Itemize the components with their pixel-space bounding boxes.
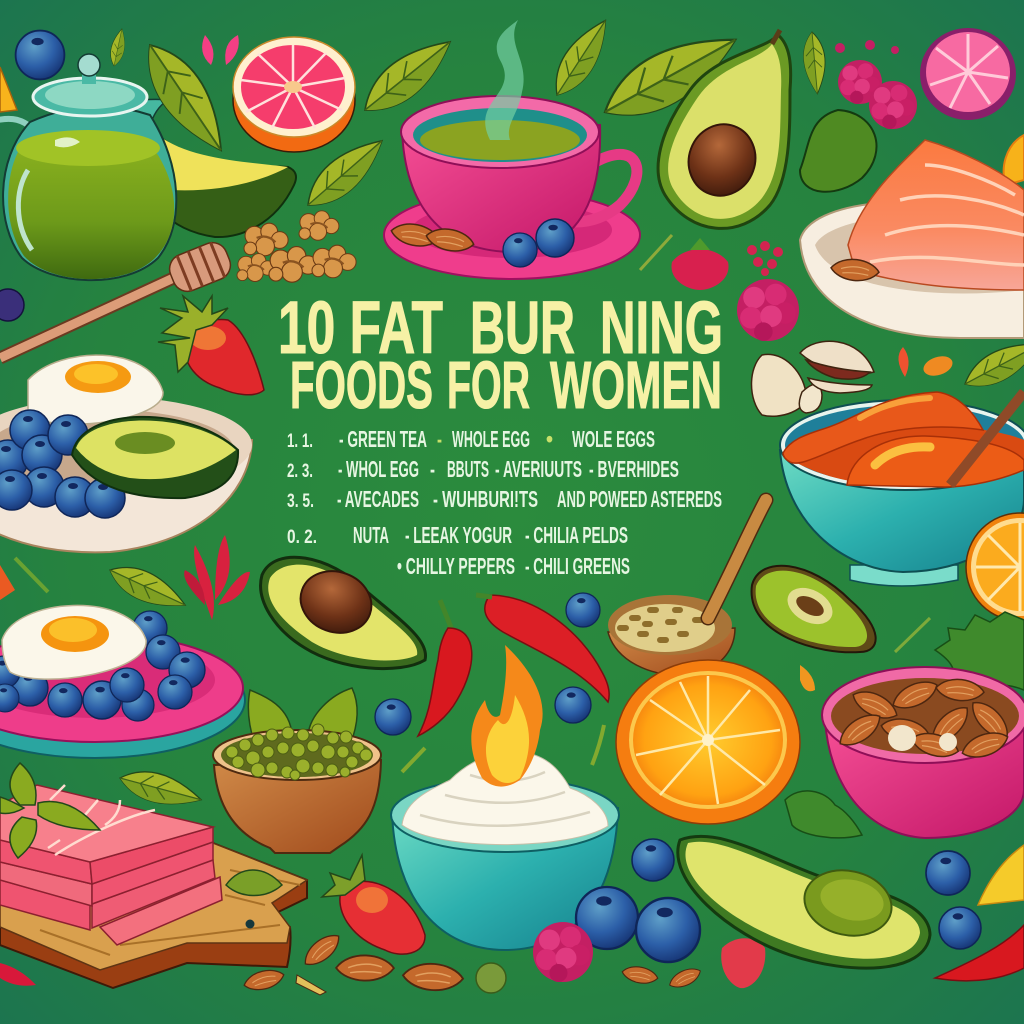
icon: blueberries bottom centre: [576, 839, 981, 962]
icon: green nut: [476, 963, 506, 993]
icon: grapefruit slice: [233, 37, 355, 152]
sub-element: blueberries on plate: [0, 611, 205, 721]
sub-element: salmon fillet: [848, 140, 1024, 290]
icon: glass teapot of green tea: [0, 54, 176, 280]
title: FOODS: [290, 348, 433, 423]
title: FOR: [447, 348, 530, 423]
list of foods: - BVERHIDES: [589, 456, 679, 482]
icon: green tea cup with saucer: [384, 20, 640, 279]
list of foods: 3. 5.: [287, 491, 314, 512]
list of foods: -: [430, 456, 435, 482]
panel: tuna on cutting board: [0, 763, 307, 988]
list of foods: •: [546, 426, 553, 452]
sub-element: spoon: [950, 392, 1024, 485]
icon: raspberry below: [737, 279, 799, 341]
icon: blueberry top left: [16, 31, 64, 79]
list of foods: -: [437, 426, 442, 452]
icon: leaf top centre right: [544, 12, 618, 103]
icon: red chili upright: [418, 600, 472, 736]
sub-element: blueberries in bowl: [0, 410, 125, 518]
icon: orange wedge left edge: [0, 67, 17, 112]
icon: almonds bottom row: [242, 930, 465, 995]
sub-element: chicken: [797, 426, 1024, 487]
icon: walnuts: [237, 211, 356, 282]
icon: orange slice right: [966, 513, 1024, 621]
icon: avocado wedge behind teapot: [158, 135, 296, 237]
icon: yogurt bowl with flame: [391, 645, 619, 950]
icon: leaf lower left: [116, 764, 205, 814]
icon: large orange slice: [616, 660, 800, 824]
icon: small green avocado: [800, 110, 877, 192]
icon: red chili bottom right: [935, 925, 1024, 981]
icon: leaf near teapot: [132, 33, 239, 162]
list of foods: - LEEAK YOGUR: [405, 522, 512, 548]
icon: pink grapefruit top right: [920, 28, 1016, 120]
list of foods: NUTA: [353, 522, 389, 548]
sub-element: cutting board: [0, 843, 307, 988]
list of foods: - WHOL EGG: [338, 456, 419, 482]
icon: bowl of grains with wooden spoon: [608, 500, 766, 675]
sub-element: yogurt swirl: [402, 752, 608, 845]
icon: small red berries: [747, 241, 783, 276]
icon: herb sprig: [895, 618, 930, 652]
sub-element: mint leaves: [0, 763, 100, 858]
icon: large avocado half: [658, 30, 791, 228]
icon: red berry near salmon: [671, 238, 729, 290]
icon: wooden bowl of green peas: [213, 688, 381, 853]
list of foods: AND POWEED ASTEREDS: [557, 486, 722, 512]
sub-element: nuts: [834, 675, 1014, 763]
icon: strawberry bottom: [322, 855, 425, 954]
icon: leaf right edge: [958, 331, 1024, 397]
icon: leaf top right: [802, 31, 828, 95]
title: 10 FAT: [278, 286, 443, 369]
icon: blueberry beside flame: [555, 687, 591, 723]
list of foods: 0. 2.: [287, 527, 317, 548]
icon: nuts bottom: [621, 963, 703, 991]
icon: leaf beside avocado wedge: [297, 128, 393, 218]
list of foods: BBUTS: [447, 456, 489, 482]
icon: blueberry left edge: [0, 289, 24, 321]
sub-element: peas: [226, 724, 372, 780]
icon: chili bottom left: [0, 963, 36, 986]
list of foods: WOLE EGGS: [572, 426, 655, 452]
icon: raspberries top right: [835, 40, 917, 129]
sub-element: steam: [485, 20, 524, 140]
list of foods: - AVECADES: [337, 486, 419, 512]
icon: small leaf top: [108, 27, 128, 67]
icon: leaf left centre: [104, 557, 191, 618]
list of foods: WHOLE EGG: [452, 426, 530, 452]
icon: strawberry: [158, 296, 264, 395]
sub-element: avocado half in bowl: [72, 417, 238, 498]
icon: leafy greens right: [935, 612, 1024, 690]
list of foods: • CHILLY PEPERS: [397, 553, 515, 579]
sub-element: leaf on board: [226, 870, 282, 896]
panel: bowl with salmon: [800, 140, 1024, 338]
icon: large leaf: [593, 18, 748, 134]
title: NING: [600, 286, 723, 369]
sub-element: blueberries on saucer: [503, 219, 574, 267]
icon: red leaf sprig: [184, 535, 250, 620]
icon: orange slice right edge: [1004, 135, 1024, 185]
icon: honey dipper: [0, 238, 235, 358]
list of foods: - CHILI GREENS: [525, 553, 630, 579]
icon: sprig: [640, 235, 672, 270]
icon: mushrooms: [752, 341, 874, 416]
sub-element: flame: [471, 645, 543, 787]
icon: small orange left edge: [0, 565, 15, 600]
list of foods: 1. 1.: [287, 431, 313, 452]
panel: teal bowl with glazed chicken: [780, 392, 1024, 586]
panel: pink bowl of nuts: [822, 667, 1024, 838]
list of foods: 2. 3.: [287, 461, 313, 482]
icon: leaf top centre left: [353, 27, 462, 124]
icon: raspberry bottom centre: [533, 922, 593, 982]
icon: small sprig left: [15, 558, 48, 592]
icon: pink petals: [202, 35, 239, 65]
icon: kiwi: [752, 566, 876, 652]
list of foods: - AVERIUUTS: [495, 456, 582, 482]
icon: dark leaf: [785, 791, 862, 838]
icon: small orange nut: [921, 353, 955, 379]
icon: red berry bottom: [721, 938, 765, 988]
icon: large avocado half bottom: [678, 836, 930, 968]
panel: pink plate with egg and blueberries: [0, 605, 245, 758]
icon: blueberry beside peas: [375, 699, 411, 735]
icon: small orange chili: [800, 665, 815, 691]
icon: avocado half centre left: [261, 557, 426, 669]
title: BUR: [470, 286, 575, 369]
sub-element: fish layers: [100, 877, 222, 945]
icon: blueberry centre: [566, 593, 600, 627]
list of foods: [287, 426, 722, 579]
title: WOMEN: [550, 348, 722, 423]
list of foods: - GREEN TEA: [339, 426, 427, 452]
panel: bowl with eggs, blueberries and avocado: [0, 355, 252, 552]
list of foods: - WUHBURI!TS: [433, 486, 538, 512]
icon: lemon wedge right edge: [978, 845, 1024, 905]
sub-element: fried egg: [2, 605, 146, 679]
icon: small chili mark: [898, 347, 909, 377]
title: [278, 286, 723, 423]
icon: red chili long: [476, 595, 609, 702]
list of foods: - CHILIA PELDS: [525, 522, 628, 548]
sub-element: almonds on saucer: [389, 219, 476, 256]
icon: small sprigs: [402, 725, 604, 772]
